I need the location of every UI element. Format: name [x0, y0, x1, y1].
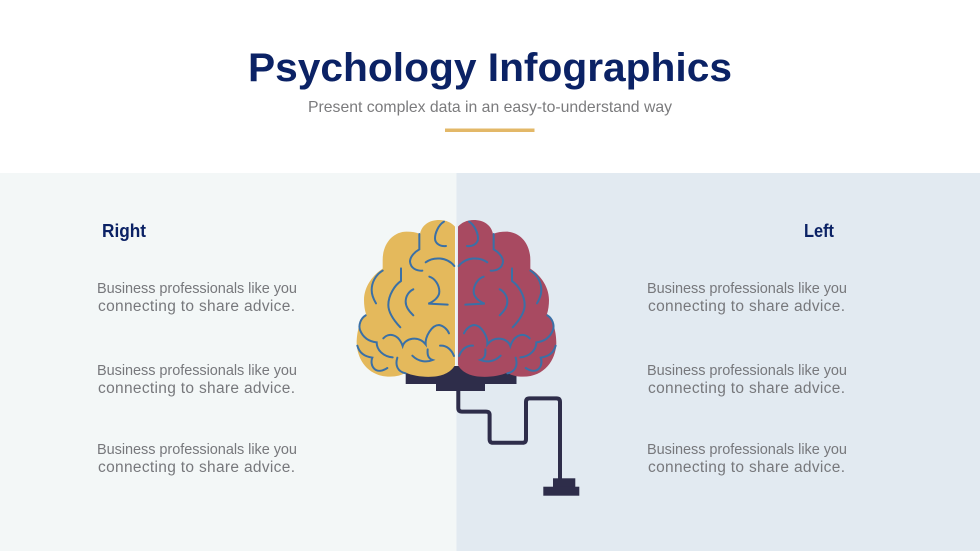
text block: left column item 2: Business professionals like you [647, 363, 847, 379]
text block: right column item 2 [97, 363, 297, 397]
title: Psychology Infographics [248, 46, 732, 90]
text block: right column item 3: connecting to share advice. [98, 459, 295, 476]
text block: right column item 2: Business professionals like you [97, 363, 297, 379]
text block: left column item 3: Business professionals like you [647, 442, 847, 458]
text block: left column item 2: connecting to share advice. [648, 380, 845, 397]
text block: left column item 3 [647, 442, 847, 476]
text block: right column item 1: Business professionals like you [97, 281, 297, 297]
text block: left column item 2 [647, 363, 847, 397]
icon: yellow right brain hemisphere [357, 220, 455, 377]
icon: cable with plug [458, 390, 579, 496]
panel: left hemisphere background [456, 173, 980, 551]
text block: left column item 1: Business professionals like you [647, 281, 847, 297]
icon: red left brain hemisphere [458, 220, 556, 377]
heading: Left: Left [804, 221, 834, 241]
text block: right column item 1 [97, 281, 297, 315]
text block: right column item 3 [97, 442, 297, 476]
text block: right column item 2: connecting to share advice. [98, 380, 295, 397]
text block: right column item 3: Business professionals like you [97, 442, 297, 458]
icon: brain stand base [406, 366, 516, 391]
panel: right hemisphere background [0, 173, 456, 551]
heading: Right: Right [102, 221, 146, 241]
subtitle: Present complex data in an easy-to-understand way [308, 99, 672, 116]
text block: left column item 3: connecting to share advice. [648, 459, 845, 476]
text block: right column item 1: connecting to share advice. [98, 298, 295, 315]
title accent line [445, 128, 534, 132]
text block: left column item 1: connecting to share advice. [648, 298, 845, 315]
text block: left column item 1 [647, 281, 847, 315]
